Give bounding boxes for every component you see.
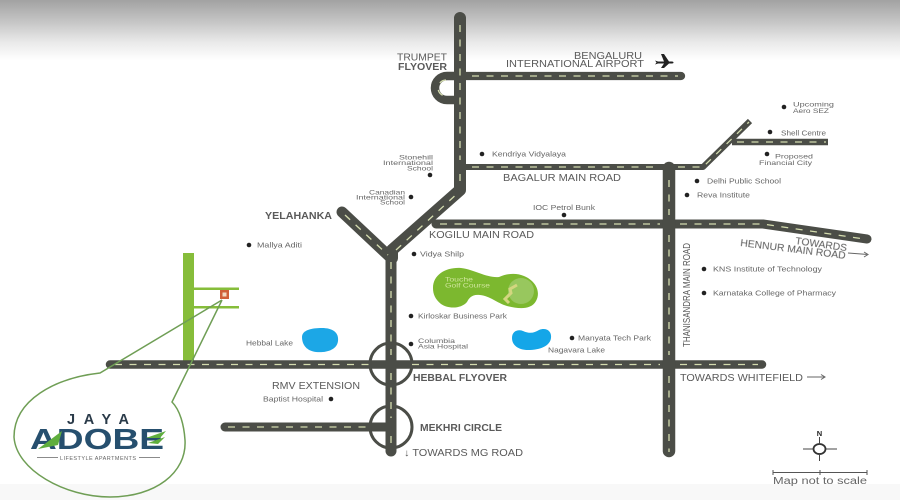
road labels: FLYOVER [398, 62, 448, 73]
icon: north compass: N [817, 429, 822, 438]
points of interest: Kirloskar Business Park [418, 312, 507, 320]
road labels: KOGILU MAIN ROAD [429, 230, 534, 241]
scale bar: Map not to scale [773, 476, 868, 487]
points of interest: School [380, 200, 405, 206]
points of interest: Aero SEZ [793, 109, 829, 115]
road labels [265, 51, 848, 459]
road labels: TOWARDS WHITEFIELD [680, 373, 803, 384]
golf course: Touche [445, 278, 474, 284]
golf course: Golf Course [445, 284, 491, 290]
project approach roads (green) [183, 253, 239, 361]
points of interest: KNS Institute of Technology [713, 264, 822, 274]
points of interest: Columbia [418, 339, 456, 345]
bottom light band [0, 484, 900, 500]
logo: ADOBE: ADOBE [30, 424, 164, 456]
icon: airplane [655, 54, 674, 68]
direction arrows [807, 252, 868, 380]
logo: tagline [37, 456, 160, 462]
Hebbal lake [302, 328, 338, 352]
points of interest: International [383, 161, 433, 167]
points of interest: Vidya Shilp [420, 250, 464, 258]
logo: tagline: LIFESTYLE APARTMENTS [60, 456, 136, 462]
points of interest: School [407, 166, 433, 172]
road network [110, 18, 867, 452]
points of interest: Karnataka College of Pharmacy [713, 288, 836, 298]
road labels: TRUMPET [397, 52, 447, 64]
road labels: RMV EXTENSION [272, 381, 360, 392]
points of interest: Manyata Tech Park [578, 334, 651, 342]
points of interest [246, 102, 836, 404]
points of interest: International [356, 196, 405, 202]
road labels: ↓ TOWARDS MG ROAD [404, 448, 523, 459]
points of interest: Kendriya Vidyalaya [492, 150, 567, 158]
points of interest: IOC Petrol Bunk [533, 203, 595, 212]
road labels: BAGALUR MAIN ROAD [503, 173, 621, 184]
Nagavara lake [512, 329, 551, 350]
points of interest: Reva Institute [697, 190, 750, 200]
points of interest: Proposed [775, 154, 813, 160]
road labels: HEBBAL FLYOVER [413, 373, 508, 384]
road labels: YELAHANKA [265, 211, 332, 222]
road labels: THANISANDRA MAIN ROAD [682, 243, 693, 347]
golf course [433, 268, 538, 308]
points of interest: Canadian [369, 190, 405, 196]
points of interest: Nagavara Lake [548, 346, 605, 354]
top grey gradient band [0, 0, 900, 60]
road labels: INTERNATIONAL AIRPORT [506, 59, 644, 70]
points of interest: Mallya Aditi [257, 240, 302, 250]
logo: JAYA: JAYA [67, 412, 130, 428]
road labels: HENNUR MAIN ROAD [740, 238, 846, 262]
points of interest: Baptist Hospital [263, 394, 323, 404]
points of interest: Hebbal Lake [246, 338, 293, 348]
road labels: TOWARDS [795, 236, 848, 254]
scale bar [773, 470, 868, 487]
callout bubble with project logo [14, 290, 229, 497]
points of interest: Stonehill [399, 156, 433, 162]
points of interest: Upcoming [793, 102, 834, 108]
points of interest: Financial City [759, 161, 812, 167]
road labels: BENGALURU [574, 51, 642, 62]
icon: north compass [803, 429, 837, 461]
points of interest: Asia Hospital [418, 344, 468, 350]
road labels: MEKHRI CIRCLE [420, 423, 502, 434]
points of interest: Delhi Public School [707, 176, 781, 186]
points of interest: Shell Centre [781, 128, 826, 138]
